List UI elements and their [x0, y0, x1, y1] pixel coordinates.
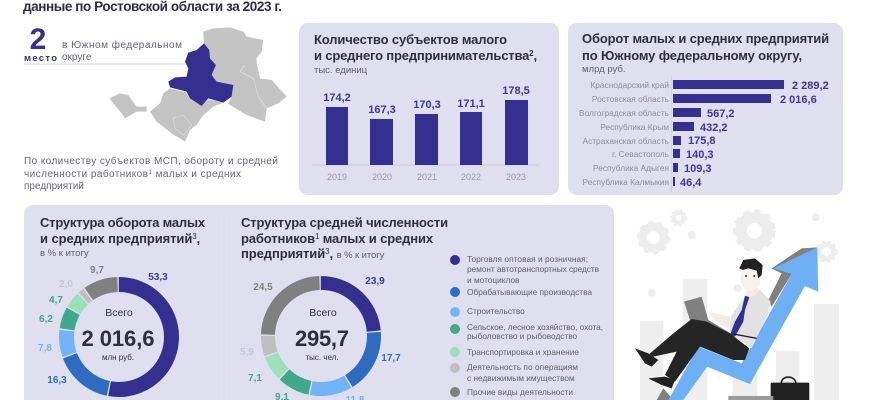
- map description: 1: [148, 169, 152, 176]
- rank number: 2: [30, 23, 46, 56]
- heading: и среднего предпринимательства: [314, 48, 529, 63]
- donut chart: turnover: млн руб.: [102, 353, 134, 362]
- donut chart: employees: Всего: [309, 307, 337, 319]
- panel: structure: [24, 205, 614, 400]
- horizontal bar chart: г. Севастополь: [612, 149, 669, 159]
- legend: ремонт автотранспортных средств: [467, 264, 600, 274]
- rank description: округе: [62, 52, 92, 63]
- donut chart: employees: 23,9: [365, 276, 385, 287]
- heading: Оборот малых и средних предприятий: [582, 31, 829, 46]
- horizontal bar chart: Республика Калмыкия: [583, 177, 669, 187]
- heading: turnover structure: и средних предприятий: [40, 231, 192, 246]
- background bars: [640, 279, 839, 400]
- heading: 2: [529, 49, 534, 58]
- column chart: 167,3: [368, 104, 396, 116]
- horizontal bar chart: Волгоградская область: [579, 108, 669, 118]
- donut chart: employees: 5,9: [240, 347, 254, 358]
- heading: ,: [533, 48, 537, 63]
- blue arrow: [668, 247, 818, 400]
- horizontal bar chart: Республика Крым: [600, 122, 669, 132]
- donut chart: employees: тыс. чел.: [305, 353, 339, 362]
- heading: turnover structure: Структура оборота малых: [40, 215, 206, 230]
- heading: employees structure: в % к итогу: [337, 250, 385, 261]
- horizontal bar chart: 432,2: [700, 122, 728, 134]
- column chart: 174,2: [323, 92, 351, 104]
- briefcase: [728, 377, 809, 400]
- donut chart: employees: 24,5: [253, 282, 273, 293]
- legend: Торговля оптовая и розничная;: [467, 254, 588, 264]
- donut chart: turnover: 9,7: [90, 265, 104, 276]
- legend: рыболовство и рыбоводство: [467, 331, 578, 341]
- heading: [582, 31, 829, 63]
- column chart: 178,5: [502, 85, 530, 97]
- horizontal bar chart: 567,2: [707, 108, 735, 120]
- map description: предприятий: [24, 181, 84, 192]
- panel: turnover by region: [568, 23, 843, 195]
- donut chart: turnover: 2 016,6: [82, 326, 154, 351]
- donut chart: turnover: 7,8: [38, 343, 52, 354]
- donut chart: turnover: 4,7: [49, 295, 63, 306]
- rank block: [24, 23, 186, 64]
- legend: Строительство: [467, 306, 525, 316]
- illustration: businessman on growth arrow: [635, 210, 839, 400]
- horizontal bar chart: 2 289,2: [792, 80, 829, 92]
- heading: employees structure: работников: [241, 231, 315, 246]
- legend: с недвижимым имуществом: [467, 373, 575, 383]
- donut chart: turnover: 6,2: [39, 314, 53, 325]
- column chart: 171,1: [457, 98, 485, 110]
- map of southern federal district: [109, 27, 287, 142]
- column chart: 2019: [327, 172, 347, 182]
- horizontal bar chart: [579, 76, 829, 192]
- rank description: в Южном федеральном: [62, 39, 182, 51]
- column chart: 2021: [417, 172, 437, 182]
- rank description: [62, 39, 182, 63]
- donut chart: turnover: 16,3: [47, 375, 67, 386]
- panel: number of SMEs: [299, 23, 559, 195]
- column chart: 2023: [506, 172, 526, 182]
- donut chart: employees: 295,7: [295, 326, 349, 351]
- heading: Количество субъектов малого: [314, 32, 507, 47]
- horizontal bar chart: 140,3: [686, 149, 714, 161]
- heading: по Южному федеральному округу,: [582, 48, 802, 63]
- heading: turnover structure: 3: [192, 232, 197, 241]
- horizontal bar chart: 46,4: [680, 177, 702, 189]
- legend: Транспортировка и хранение: [467, 347, 579, 357]
- donut chart: turnover: Всего: [105, 307, 133, 319]
- legend: Обрабатывающие производства: [467, 287, 592, 297]
- unit: тыс. единиц: [314, 65, 368, 76]
- heading: employees structure: 1: [315, 232, 320, 241]
- donut chart: turnover: 2,0: [59, 279, 73, 290]
- map description: [24, 155, 278, 192]
- horizontal bar chart: Астраханская область: [582, 136, 669, 146]
- horizontal bar chart: Республика Адыгея: [593, 163, 669, 173]
- horizontal bar chart: Ростовская область: [592, 94, 669, 104]
- horizontal bar chart: 175,8: [688, 135, 716, 147]
- heading: turnover structure: [40, 215, 206, 246]
- legend: Прочие виды деятельности: [467, 387, 573, 397]
- column chart: 2022: [461, 172, 481, 182]
- donut chart: turnover: 53,3: [148, 272, 168, 283]
- donut chart: turnover: [38, 265, 172, 390]
- column chart: 2020: [372, 172, 392, 182]
- horizontal bar chart: 109,3: [684, 163, 712, 175]
- legend: [450, 254, 603, 397]
- man: [635, 258, 771, 388]
- heading: employees structure: [241, 215, 448, 261]
- column chart: 170,3: [413, 99, 441, 111]
- heading: employees structure: предприятий: [241, 246, 325, 261]
- heading: employees structure: ,: [330, 246, 337, 261]
- horizontal bar chart: 2 016,6: [780, 94, 817, 106]
- map description: По количеству субъектов МСП, обороту и средней: [24, 155, 278, 167]
- donut chart: employees: [240, 276, 401, 400]
- legend: и мотоциклов: [467, 275, 520, 285]
- heading: employees structure: 3: [325, 247, 330, 256]
- background gears: [638, 210, 837, 262]
- unit: млрд руб.: [582, 64, 625, 75]
- legend: Деятельность по операциям: [467, 362, 578, 372]
- unit: в % к итогу: [40, 248, 89, 259]
- heading: turnover structure: ,: [197, 231, 200, 246]
- column chart: [312, 85, 538, 182]
- heading: [314, 32, 537, 63]
- map description: численности работников: [24, 169, 148, 180]
- donut chart: employees: 17,7: [381, 353, 401, 364]
- legend: Сельское, лесное хозяйство, охота,: [467, 322, 603, 332]
- map description: малых и средних: [152, 169, 241, 180]
- horizontal bar chart: Краснодарский край: [590, 80, 669, 90]
- arrow shadow: [657, 247, 818, 400]
- heading: employees structure: малых и средних: [319, 231, 434, 246]
- rank caption: место: [24, 53, 57, 64]
- donut chart: employees: 7,1: [248, 373, 262, 384]
- heading: employees structure: Структура средней численности: [241, 215, 448, 230]
